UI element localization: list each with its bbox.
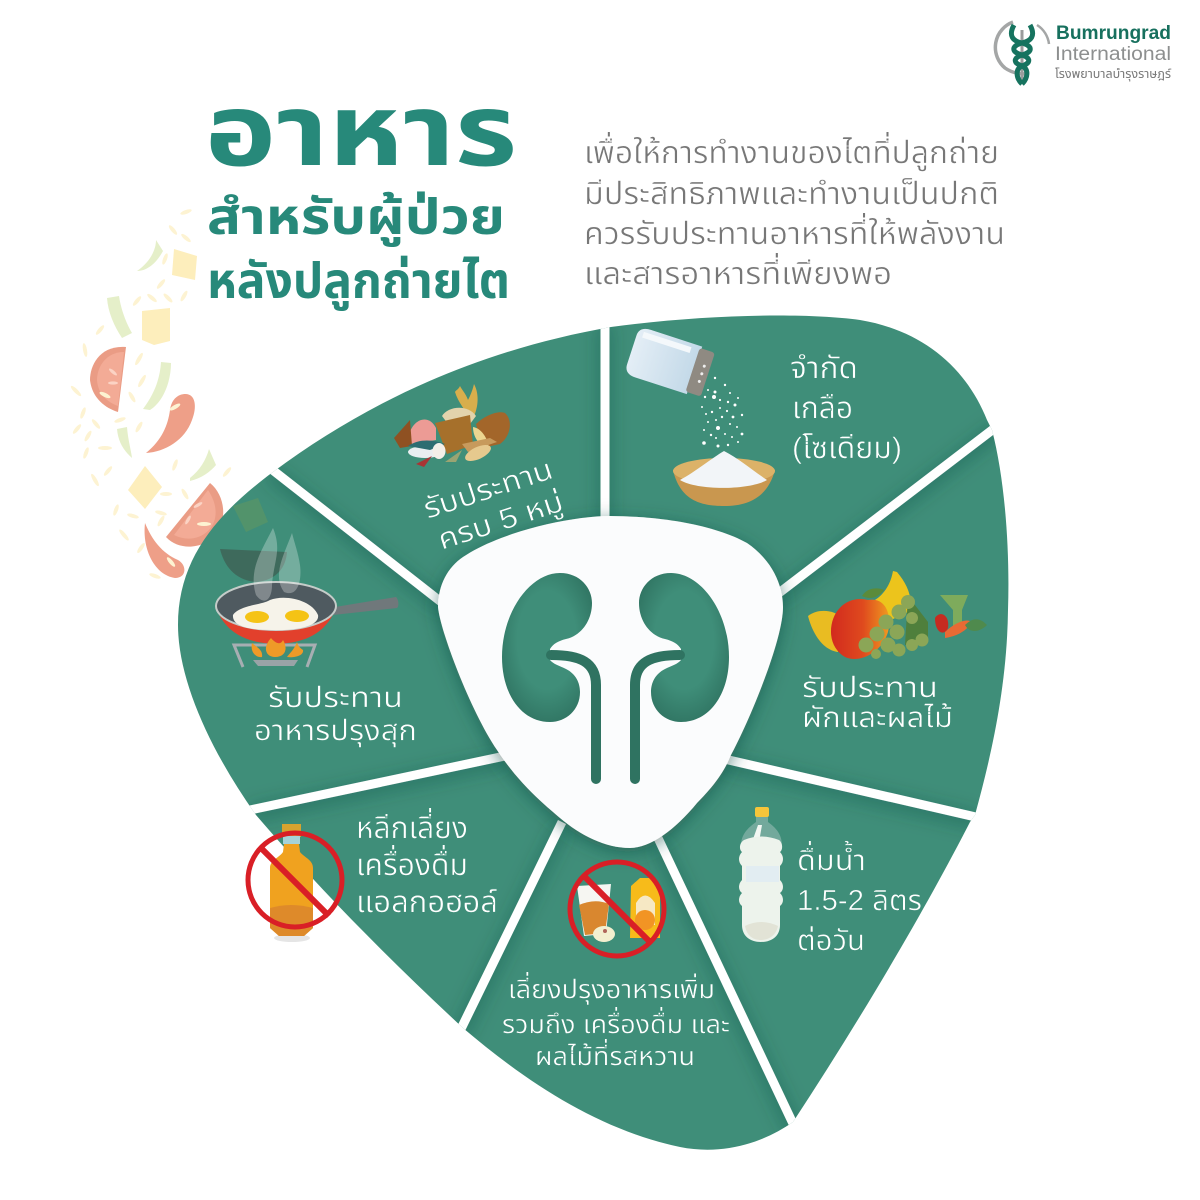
label: drink water: ดื่มน้ำ bbox=[797, 840, 866, 877]
title: อาหาร bbox=[205, 75, 517, 187]
label: drink water: 1.5-2 ลิตร bbox=[797, 885, 922, 917]
label: eat cooked food bbox=[254, 682, 417, 747]
icon: frying pan with eggs bbox=[216, 498, 398, 667]
label: avoid added seasoning: เลี่ยงปรุงอาหารเพิ่ม bbox=[508, 971, 715, 1005]
label: avoid alcohol bbox=[356, 807, 498, 919]
title: สำหรับผู้ป่วย bbox=[207, 189, 505, 247]
icon: water bottle bbox=[739, 807, 783, 942]
logo: Bumrungrad International bbox=[995, 22, 1172, 84]
intro paragraph: เพื่อให้การทำงานของไตที่ปลูกถ่าย bbox=[584, 131, 999, 171]
icon: kidneys bbox=[502, 573, 729, 779]
label: five food groups: ครบ 5 หมู่ bbox=[434, 486, 568, 558]
label: avoid alcohol: เครื่องดื่ม bbox=[356, 844, 468, 882]
intro paragraph: มีประสิทธิภาพและทำงานเป็นปกติ bbox=[584, 176, 999, 211]
label: eat fruit and vegetables: รับประทาน bbox=[802, 672, 938, 704]
label: limit salt: (โซเดียม) bbox=[792, 432, 902, 465]
label: limit salt: จำกัด bbox=[790, 352, 858, 385]
logo: Bumrungrad International: International bbox=[1055, 44, 1171, 65]
logo: Bumrungrad International: Bumrungrad bbox=[1056, 23, 1171, 44]
label: five food groups bbox=[420, 454, 568, 559]
label: drink water: ต่อวัน bbox=[797, 925, 865, 957]
label: avoid alcohol: แอลกอฮอล์ bbox=[356, 886, 498, 919]
label: avoid added seasoning: ผลไม้ที่รสหวาน bbox=[535, 1038, 695, 1071]
logo: Bumrungrad International: โรงพยาบาลบำรุงราษฎร์ bbox=[1055, 67, 1172, 81]
label: avoid added seasoning: รวมถึง เครื่องดื่ม และ bbox=[502, 1006, 730, 1039]
panel: central kidney shield bbox=[438, 516, 783, 848]
intro paragraph: ควรรับประทานอาหารที่ให้พลังงาน bbox=[584, 212, 1005, 251]
icon: salt shaker and bowl bbox=[624, 326, 775, 506]
icon: juice prohibited bbox=[570, 862, 664, 956]
label: limit salt: เกลือ bbox=[792, 392, 853, 425]
food scatter: tomato, sausage, tofu, cucumber and rice bbox=[70, 208, 232, 580]
label: five food groups: รับประทาน bbox=[420, 454, 557, 526]
label: avoid added seasoning bbox=[502, 971, 730, 1071]
label: avoid alcohol: หลีกเลี่ยง bbox=[356, 807, 468, 845]
intro paragraph: และสารอาหารที่เพียงพอ bbox=[584, 252, 892, 291]
icon: alcohol prohibited bbox=[248, 824, 342, 942]
icon: fruit and vegetables bbox=[808, 571, 987, 659]
title bbox=[205, 75, 517, 311]
title: หลังปลูกถ่ายไต bbox=[207, 253, 510, 311]
label: eat fruit and vegetables bbox=[802, 672, 953, 734]
label: eat cooked food: รับประทาน bbox=[268, 682, 403, 714]
panel: segmented leaf shape bbox=[178, 316, 1008, 1150]
label: limit salt bbox=[790, 352, 902, 465]
label: eat cooked food: อาหารปรุงสุก bbox=[254, 715, 417, 747]
icon: five food groups bbox=[394, 384, 510, 467]
label: drink water bbox=[797, 840, 922, 957]
intro paragraph bbox=[584, 131, 1005, 291]
label: eat fruit and vegetables: ผักและผลไม้ bbox=[802, 702, 953, 734]
